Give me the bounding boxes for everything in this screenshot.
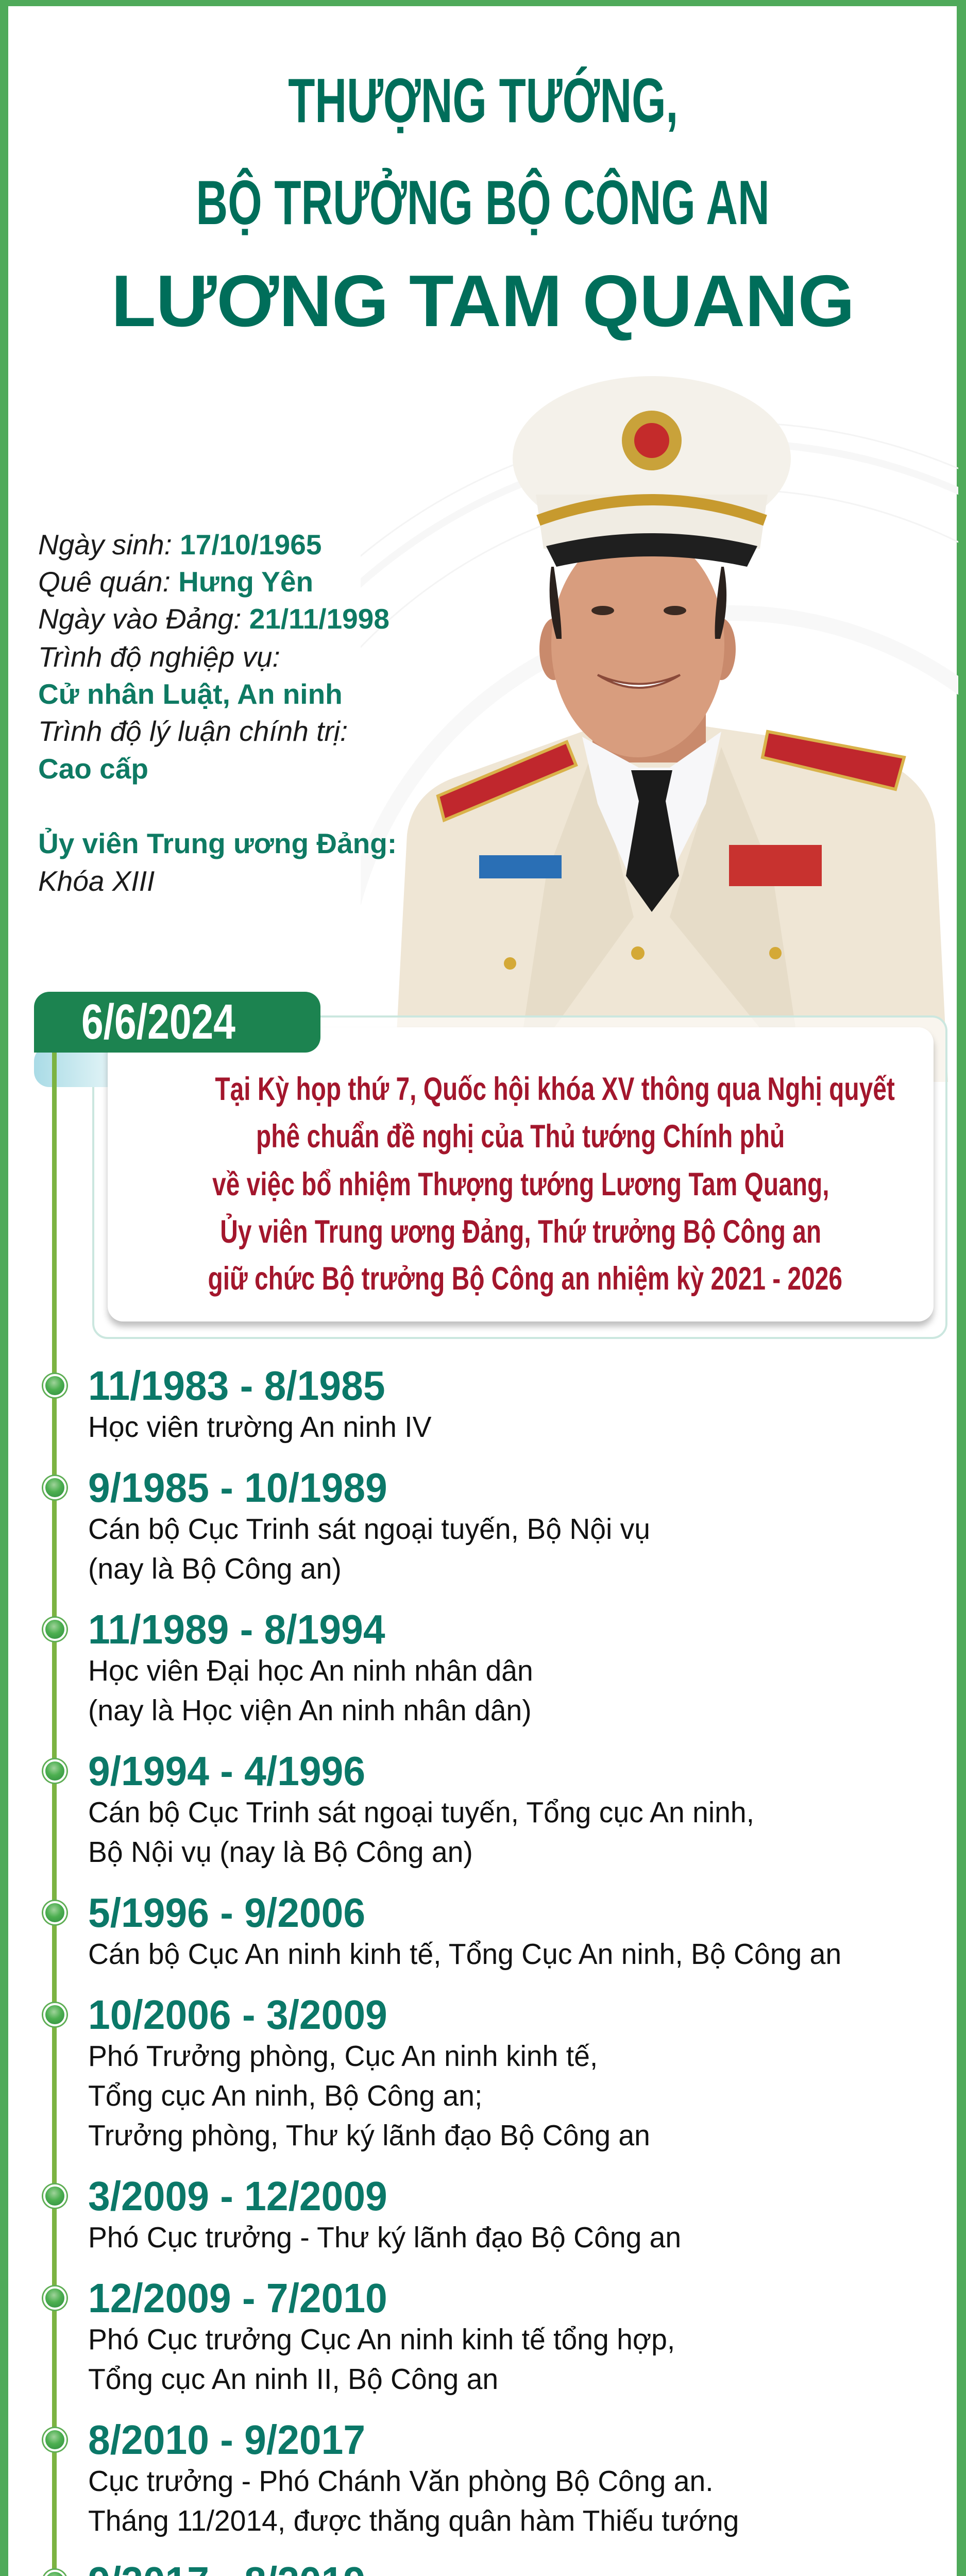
- info block: Ngày sinh: 17/10/1965: [38, 529, 321, 561]
- callout text: giữ chức Bộ trưởng Bộ Công an nhiệm kỳ 2021 - 2026: [208, 1261, 842, 1297]
- entry 9: [42, 2417, 739, 2537]
- timeline: 9/1985 - 10/1989: [88, 1465, 387, 1511]
- title line 1: THƯỢNG TƯỚNG,: [288, 65, 678, 135]
- timeline: Tổng cục An ninh II, Bộ Công an: [88, 2363, 498, 2396]
- date badge: [34, 992, 320, 1053]
- medallion: [149, 422, 966, 1587]
- background medallion and portrait: [361, 376, 958, 1082]
- title line 2: BỘ TRƯỞNG BỘ CÔNG AN: [196, 167, 770, 238]
- info block: Cao cấp: [38, 753, 148, 785]
- info block: Trình độ nghiệp vụ:: [38, 641, 280, 673]
- timeline: Học viên Đại học An ninh nhân dân: [88, 1654, 533, 1687]
- callout text: Ủy viên Trung ương Đảng, Thứ trưởng Bộ Công an: [220, 1214, 821, 1250]
- entry 10: [43, 2558, 365, 2576]
- timeline: Cán bộ Cục Trinh sát ngoại tuyến, Bộ Nội vụ: [88, 1513, 650, 1546]
- timeline: Tổng cục An ninh, Bộ Công an;: [88, 2079, 482, 2112]
- timeline: 9/1994 - 4/1996: [88, 1748, 365, 1794]
- callout text: về việc bổ nhiệm Thượng tướng Lương Tam Quang,: [212, 1166, 829, 1202]
- date badge: 6/6/2024: [81, 994, 235, 1049]
- title line 3: LƯƠNG TAM QUANG: [111, 260, 855, 342]
- info block: Cử nhân Luật, An ninh: [38, 678, 343, 710]
- title: [111, 65, 855, 342]
- callout text: phê chuẩn đề nghị của Thủ tướng Chính phủ: [256, 1118, 785, 1155]
- entry 5: [42, 1890, 841, 1971]
- timeline: Học viên trường An ninh IV: [88, 1411, 431, 1444]
- entry 2: [42, 1465, 650, 1585]
- timeline: Bộ Nội vụ (nay là Bộ Công an): [88, 1836, 473, 1869]
- timeline: Tháng 11/2014, được thăng quân hàm Thiếu tướng: [88, 2504, 739, 2537]
- timeline: Cán bộ Cục Trinh sát ngoại tuyến, Tổng cục An ninh,: [88, 1796, 754, 1829]
- entry 3: [42, 1606, 533, 1727]
- timeline: 8/2010 - 9/2017: [88, 2417, 365, 2463]
- timeline: 3/2009 - 12/2009: [88, 2173, 387, 2219]
- info block: [38, 529, 397, 897]
- timeline: 5/1996 - 9/2006: [88, 1890, 365, 1936]
- entry 6: [42, 1992, 650, 2152]
- info block: Trình độ lý luận chính trị:: [38, 715, 348, 747]
- info block: Ủy viên Trung ương Đảng:: [38, 827, 397, 859]
- timeline: 11/1983 - 8/1985: [88, 1363, 385, 1409]
- timeline: 12/2009 - 7/2010: [88, 2275, 387, 2321]
- timeline: 11/1989 - 8/1994: [88, 1606, 385, 1652]
- entry 4: [42, 1748, 754, 1869]
- timeline: Phó Trưởng phòng, Cục An ninh kinh tế,: [88, 2040, 598, 2073]
- callout card: 6/6/2024: [34, 992, 947, 1339]
- timeline: (nay là Bộ Công an): [88, 1552, 342, 1585]
- timeline: Phó Cục trưởng Cục An ninh kinh tế tổng hợp,: [88, 2323, 675, 2356]
- timeline: Cục trưởng - Phó Chánh Văn phòng Bộ Công an.: [88, 2465, 714, 2498]
- timeline: Phó Cục trưởng - Thư ký lãnh đạo Bộ Công an: [88, 2221, 681, 2254]
- info block: Quê quán: Hưng Yên: [38, 566, 313, 598]
- info block: Khóa XIII: [38, 865, 155, 897]
- callout text: [208, 1071, 895, 1297]
- entry 7: [42, 2173, 681, 2254]
- entry 8: [42, 2275, 675, 2396]
- info block: Ngày vào Đảng: 21/11/1998: [38, 603, 389, 635]
- timeline: [42, 1363, 841, 2576]
- timeline: 10/2006 - 3/2009: [88, 1992, 387, 2038]
- timeline: (nay là Học viện An ninh nhân dân): [88, 1694, 532, 1727]
- timeline: Trưởng phòng, Thư ký lãnh đạo Bộ Công an: [88, 2119, 650, 2152]
- entry 1: [42, 1363, 432, 1444]
- portrait: [394, 376, 948, 1082]
- callout text: Tại Kỳ họp thứ 7, Quốc hội khóa XV thông qua Nghị quyết: [215, 1071, 895, 1107]
- timeline: Cán bộ Cục An ninh kinh tế, Tổng Cục An ninh, Bộ Công an: [88, 1938, 841, 1971]
- timeline line: [52, 1053, 57, 2576]
